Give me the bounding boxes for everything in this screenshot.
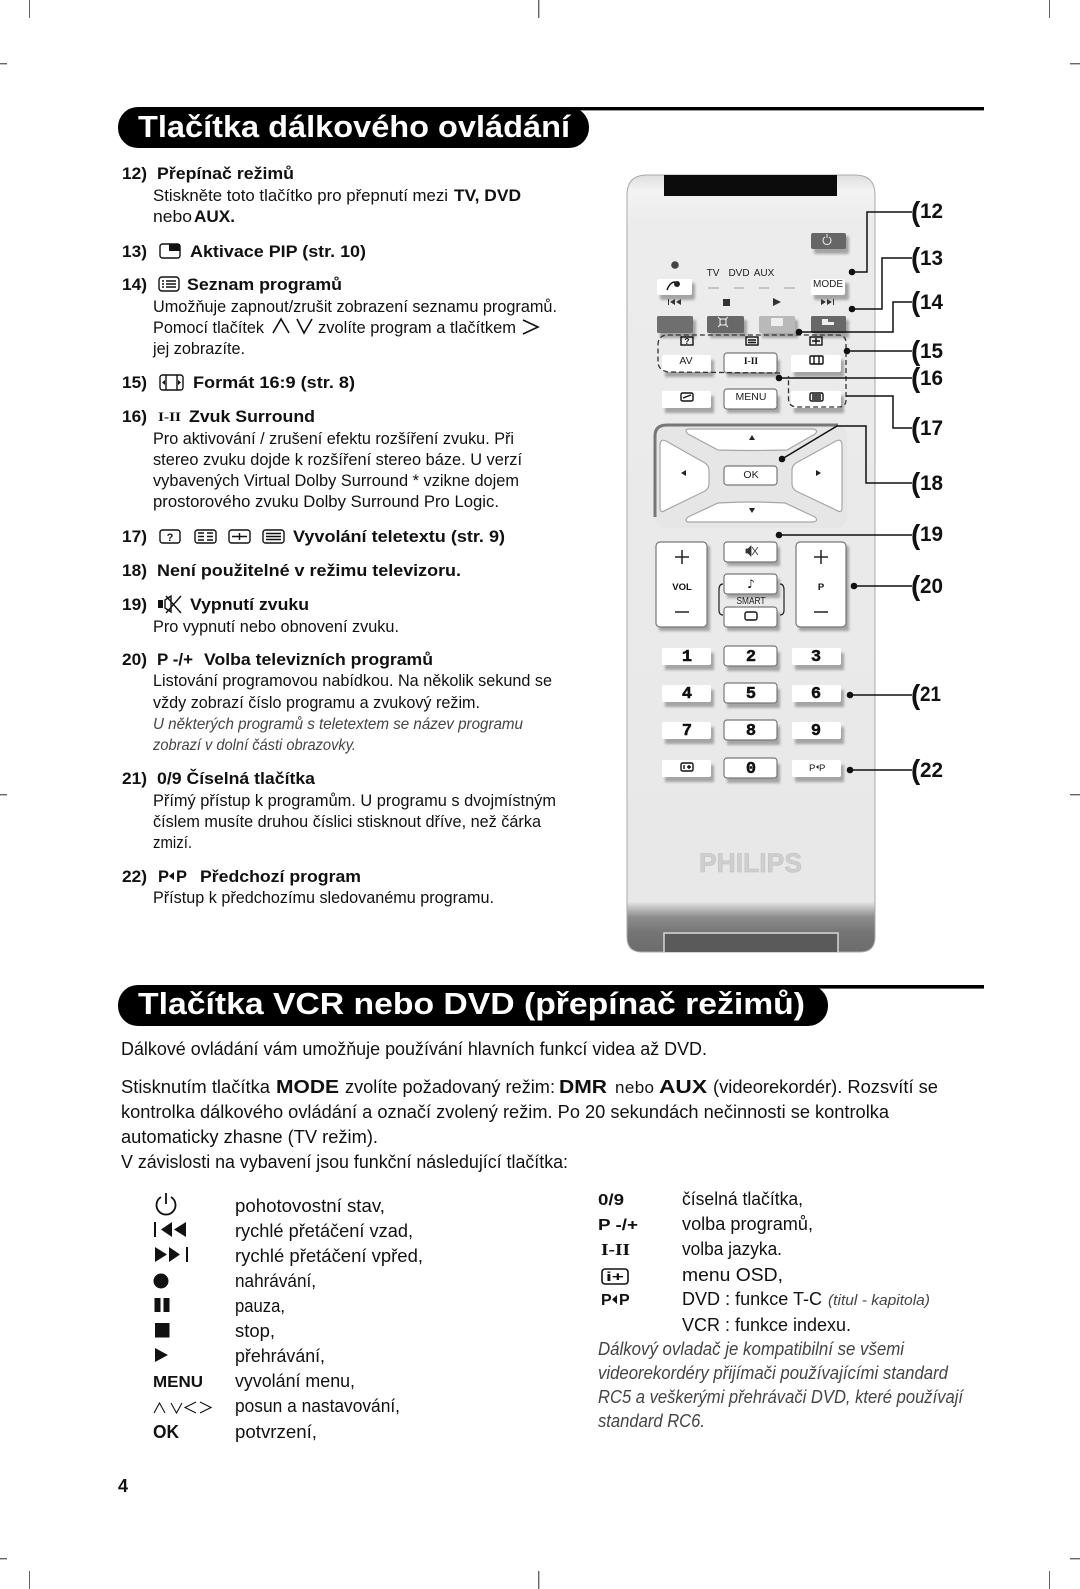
number keys: 4 [682,685,692,704]
item 21: Číselná tlačítka: Přímý přístup k programům. U programu s dvojmístným [153,792,556,810]
icon: format [160,375,183,390]
item 14: Seznam programů: Umožňuje zapnout/zrušit zobrazení seznamu programů. [153,298,557,316]
centre smart buttons: ♪ [747,577,755,591]
legend: left column: pauza, [235,1296,285,1316]
note: RC5 a veškerými přehrávači DVD, které používají [598,1387,965,1407]
callout 20 [851,570,943,601]
item 22: Předchozí program: P [176,868,187,886]
page number: 4 [118,1476,128,1496]
legend: left column: pohotovostní stav, [235,1196,385,1216]
button: MODE: MODE [813,279,843,290]
item 20: P -/+ Volba televizních programů: vždy zobrazí číslo programu a zvukový režim. [153,694,480,712]
callouts [776,196,943,785]
icon: record [154,1274,168,1288]
item 17: Vyvolání teletextu: Vyvolání teletextu (str. 9) [293,528,505,546]
item 22: Předchozí program: 22) [122,868,147,886]
item 15: Formát 16:9: Formát 16:9 (str. 8) [193,374,355,392]
intro text: MODE [276,1077,339,1097]
button: MODE [811,279,845,295]
icon: previous programme: P [601,1292,612,1309]
callout 22: ( [911,754,921,785]
callout 17: ( [911,412,921,443]
callout 20: ( [911,570,921,601]
item 12: Přepínač režimů: nebo [153,208,192,226]
legend: left column: stop, [235,1321,275,1341]
callout 19: 19 [920,523,943,546]
item 19: Vypnutí zvuku: 19) [122,596,147,614]
callout 17 [846,396,943,443]
callout 18 [779,426,943,498]
icon: standby [156,1193,176,1215]
intro text: Stisknutím tlačítka [121,1077,271,1097]
legend: left column: nahrávání, [235,1271,316,1291]
mode indicator dashes [708,287,795,289]
number keys: 9 [811,722,821,741]
legend: left column: posun a nastavování, [235,1396,400,1416]
icon: info plus [602,1269,628,1284]
buttons row AV: AV [679,355,693,367]
intro text: nebo [615,1078,654,1097]
callout 18: 18 [920,472,943,495]
item 16: Zvuk Surround: vybavených Virtual Dolby Surround * vzikne dojem [153,472,519,490]
programme rocker [796,542,846,627]
callout 14: 14 [920,291,943,314]
item 14: Seznam programů: Seznam programů [187,276,342,294]
icon: PIP [160,244,180,258]
callout 21: ( [911,679,921,710]
buttons row AV: I-II [744,357,758,367]
number keys: 7 [682,722,692,741]
item 20: P -/+ Volba televizních programů: Listování programovou nabídkou. Na několik sekund se [153,672,552,690]
icon: rewind [154,1222,186,1237]
item 12: Přepínač režimů [122,165,521,226]
number keys: 8 [746,722,756,741]
legend: left column: vyvolání menu, [235,1371,355,1391]
icon: fast forward [155,1247,188,1262]
note [598,1339,965,1431]
callout 13 [849,242,943,312]
remote control [627,175,875,952]
teletext small icons: ? [685,337,690,346]
number keys: 6 [811,685,821,704]
legend: right column: VCR : funkce indexu. [682,1315,851,1335]
callout 13: 13 [920,247,943,270]
intro text: (videorekordér). Rozsvítí se [713,1077,938,1097]
callout 12: 12 [920,200,943,223]
item 18: Není použitelné: 18) [122,562,147,580]
item 16: Zvuk Surround: Pro aktivování / zrušení efektu rozšíření zvuku. Při [153,430,514,448]
button: swap [657,279,692,295]
callout 15 [844,335,943,366]
callout 21: 21 [920,683,941,706]
icon: info plus: i+ [606,1269,625,1284]
item 15: Formát 16:9 [122,374,355,392]
navigation pad: OK [743,469,759,481]
item 15: Formát 16:9: 15) [122,374,147,392]
item 16: Zvuk Surround: 16) [122,408,147,426]
programme rocker: P [818,582,825,593]
legend: right column [598,1189,965,1431]
item 12: Přepínač režimů: Přepínač režimů [157,165,294,183]
dashed highlight [658,335,846,407]
callout 19: ( [911,519,921,550]
legend: right column: menu OSD, [682,1265,783,1285]
callout 16 [776,362,943,393]
item 13: Aktivace PIP: 13) [122,243,147,261]
callout 22 [847,754,943,785]
number keys: 3 [811,648,821,667]
item 21: Číselná tlačítka: zmizí. [153,834,192,852]
heading: Tlačítka dálkového ovládání: Tlačítka dálkového ovládání [138,109,571,144]
item 14: Seznam programů: 14) [122,276,147,294]
number keys: P [819,763,825,774]
item 22: Předchozí program [122,868,494,907]
intro text: Dálkové ovládání vám umožňuje používání hlavních funkcí videa až DVD. [121,1039,707,1059]
icon: stop [155,1323,170,1338]
mode labels: AUX [754,268,775,279]
legend: right column: volba programů, [682,1214,813,1234]
intro text: V závislosti na vybavení jsou funkční následující tlačítka: [121,1152,568,1172]
centre smart buttons: SMART [736,596,766,607]
indicator LED [671,261,679,269]
callout 16: 16 [920,367,943,390]
number keys: 1 [682,648,692,667]
item 19: Vypnutí zvuku: Pro vypnutí nebo obnovení zvuku. [153,618,399,636]
callout 13: ( [911,242,921,273]
icon: teletext set: ? [167,532,174,544]
top infrared window [664,175,837,196]
legend: right column: číselná tlačítka, [682,1189,803,1209]
item 19: Vypnutí zvuku [122,596,399,636]
item 17: Vyvolání teletextu: 17) [122,528,147,546]
heading: Tlačítka dálkového ovládání [118,107,984,148]
item 22: Předchozí program: P [158,868,169,886]
legend: right column: DVD : funkce T-C [682,1289,822,1309]
Philips logo: PHILIPS [699,848,802,878]
icon: previous programme [601,1292,630,1309]
item 19: Vypnutí zvuku: Vypnutí zvuku [190,596,309,614]
callout 15: 15 [920,340,943,363]
transport symbols [668,298,834,306]
legend: right column: P -/+ [598,1217,638,1234]
number keys: P [809,763,815,774]
legend: left column: potvrzení, [235,1422,317,1442]
callout 15: ( [911,335,921,366]
note: standard RC6. [598,1411,705,1431]
item 20: P -/+ Volba televizních programů: 20) [122,651,147,669]
legend: left column: rychlé přetáčení vpřed, [235,1246,423,1266]
item 18: Není použitelné: Není použitelné v režimu televizoru. [157,562,461,580]
volume rocker [656,542,707,627]
callout 16: ( [911,362,921,393]
callout 20: 20 [920,575,943,598]
number keys: 2 [746,648,756,667]
buttons row MENU: MENU [736,391,766,403]
item 12: Přepínač režimů: TV, DVD [454,187,521,205]
item 14: Seznam programů: zvolíte program a tlačítkem [318,319,516,337]
icon: teletext set [160,530,284,544]
item 14: Seznam programů [122,276,557,358]
legend: left column: MENU [153,1374,203,1391]
legend: left column: OK [153,1422,179,1442]
heading: Tlačítka VCR nebo DVD: Tlačítka VCR nebo DVD (přepínač režimů) [138,986,805,1021]
item 21: Číselná tlačítka: 0/9 Číselná tlačítka [157,769,316,788]
icon: previous programme: P [619,1292,630,1309]
item 20: P -/+ Volba televizních programů: P -/+ [157,651,193,669]
legend: right column: (titul - kapitola) [828,1292,930,1309]
volume rocker: VOL [672,582,692,593]
intro text: AUX [659,1077,707,1097]
item 16: Zvuk Surround: stereo zvuku dojde k rozšíření stereo báze. U verzí [153,451,522,469]
callout 18: ( [911,467,921,498]
item 13: Aktivace PIP: Aktivace PIP (str. 10) [190,243,366,261]
mode labels: DVD [728,268,750,279]
callout 12 [849,196,943,275]
item 12: Přepínač režimů: AUX. [194,208,235,226]
legend: right column: I-II [601,1240,630,1259]
item 12: Přepínač režimů: Stiskněte toto tlačítko pro přepnutí mezi [153,187,448,205]
icon: program list [159,277,179,291]
number keys [662,646,841,779]
item 20: P -/+ Volba televizních programů: U některých programů s teletextem se název programu [153,715,523,733]
buttons row MENU [662,389,841,409]
remote body [627,175,875,952]
legend: right column: 0/9 [598,1192,624,1209]
callout 17: 17 [920,417,943,440]
callout 22: 22 [920,759,943,782]
legend: left column [153,1193,423,1442]
item 22: Předchozí program: Předchozí program [200,868,361,886]
legend: left column: přehrávání, [235,1346,325,1366]
item 12: Přepínač režimů: 12) [122,165,147,183]
item 20: P -/+ Volba televizních programů [122,651,552,754]
item 16: Zvuk Surround: I-II [158,409,181,424]
item 13: Aktivace PIP [122,243,366,261]
item 16: Zvuk Surround [122,408,522,511]
callout 14 [796,286,943,335]
item 20: P -/+ Volba televizních programů: zobrazí v dolní části obrazovky. [152,737,356,754]
item 16: Zvuk Surround: prostorového zvuku Dolby Surround Pro Logic. [153,493,499,511]
item 14: Seznam programů: Pomocí tlačítek [153,319,265,337]
bottom slot [664,932,838,952]
icon: play [155,1348,168,1362]
item 21: Číselná tlačítka: 21) [122,770,147,788]
mode labels [707,268,775,279]
buttons row AV [662,353,841,373]
mode labels: TV [707,268,720,279]
icon: navigation arrows [154,1402,211,1413]
icon: right arrow [523,320,538,334]
icon: mute [158,596,181,613]
legend: right column: volba jazyka. [682,1239,782,1259]
intro text: DMR [559,1077,607,1097]
item 14: Seznam programů: jej zobrazíte. [152,340,245,358]
item 17: Vyvolání teletextu [122,528,505,546]
number keys: 5 [746,685,756,704]
callout 12: ( [911,196,921,227]
icon: pause [154,1298,170,1312]
navigation pad [655,425,847,528]
callout 19 [776,519,943,550]
icon: up down arrows [273,319,312,333]
intro text: kontrolka dálkového ovládání a označí zvolený režim. Po 20 sekundách nečinnosti se kontrolka [121,1102,890,1122]
note: videorekordéry přijímači používajícími standard [598,1363,949,1383]
callout 21 [847,679,941,710]
item 20: P -/+ Volba televizních programů: Volba televizních programů [204,651,433,669]
centre smart buttons [719,542,784,627]
legend: left column: rychlé přetáčení vzad, [235,1221,413,1241]
heading: Tlačítka VCR nebo DVD [118,985,984,1026]
intro text: zvolíte požadovaný režim: [345,1077,555,1097]
item 21: Číselná tlačítka: číslem musíte druhou číslici stisknout dříve, než čárka [153,813,542,831]
intro text: automaticky zhasne (TV režim). [121,1127,378,1147]
item 22: Předchozí program: Přístup k předchozímu sledovanému programu. [153,889,494,907]
item 16: Zvuk Surround: Zvuk Surround [189,408,315,426]
button: power [811,233,846,249]
note: Dálkový ovladač je kompatibilní se všemi [598,1339,905,1359]
intro text [121,1039,938,1172]
number keys: 0 [746,760,756,779]
coloured buttons row [657,316,846,333]
teletext small icons [681,337,822,346]
callout 14: ( [911,286,921,317]
item 21: Číselná tlačítka [122,769,556,852]
